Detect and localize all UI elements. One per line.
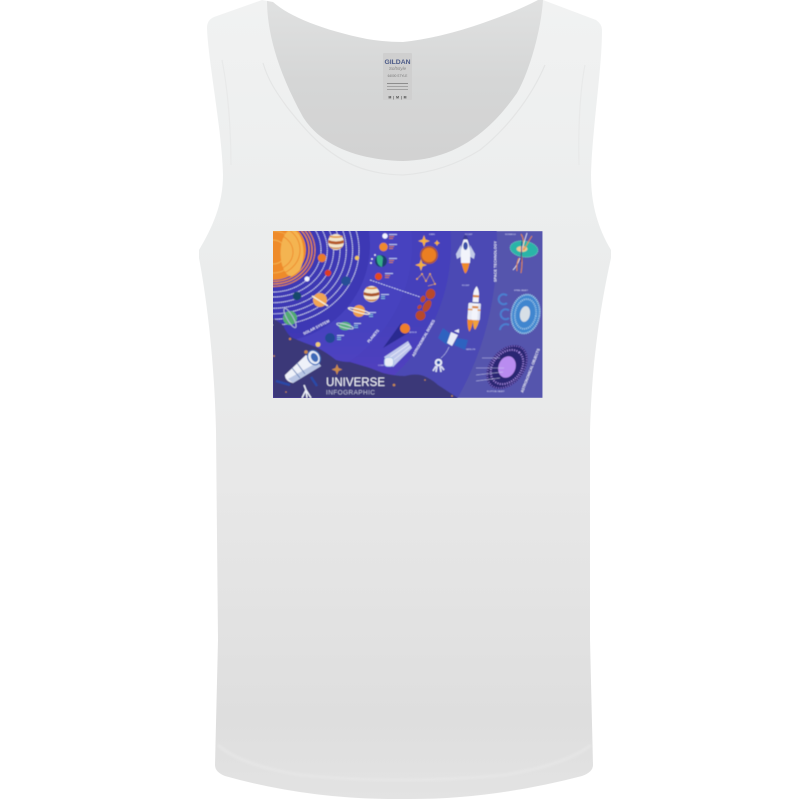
section labels — [303, 240, 541, 393]
tiny captions: SPIRAL GALAXY — [514, 289, 529, 292]
icon: earth — [370, 254, 387, 267]
stars and constellation — [415, 235, 440, 286]
tiny captions: ELLIPTICAL GALAXY — [487, 390, 505, 393]
icon: dark galaxy — [476, 344, 528, 390]
icon: telescope — [276, 348, 323, 398]
tiny planet captions — [337, 234, 397, 340]
title: INFOGRAPHIC — [326, 390, 375, 396]
icon: striped gas giant — [328, 234, 344, 250]
section labels: SPACE TECHNOLOGY — [494, 240, 498, 282]
garment body — [199, 0, 611, 799]
icon: spiral galaxy — [510, 293, 542, 335]
tiny captions: WORMHOLE — [505, 234, 517, 236]
hem seam — [218, 745, 591, 780]
icon: ringed orange planet — [312, 293, 328, 307]
title — [326, 377, 385, 396]
icons: ring gauges — [499, 294, 509, 330]
icon: star planet — [420, 246, 438, 264]
neck label: Gildan: GILDAN — [384, 59, 411, 66]
armhole seams — [222, 60, 585, 165]
icon: green ringed planet — [336, 322, 354, 330]
tank top garment — [199, 0, 611, 799]
section labels: ASTRONOMICAL OBJECTS — [520, 348, 541, 393]
panel: solar system orbits — [273, 231, 360, 326]
neck label: Gildan: Softstyle — [389, 66, 407, 71]
panel: planets column — [316, 233, 388, 347]
printed universe infographic — [273, 231, 542, 398]
neck label: Gildan: M | M | M — [389, 96, 407, 100]
tiny captions: SATELLITE — [466, 348, 476, 351]
tiny captions: COMET — [378, 365, 385, 367]
neck label: Gildan — [383, 53, 412, 100]
hill: dark landscape — [273, 318, 458, 398]
icon: small rocket — [456, 234, 475, 274]
diagram line: planets to bodies — [370, 280, 420, 297]
title: UNIVERSE — [326, 377, 385, 389]
white area above back collar — [262, 0, 538, 42]
neck opening — [267, 0, 543, 161]
icons: asteroids — [416, 287, 437, 320]
neck label: Gildan: 64000 STYLE — [388, 74, 407, 78]
section labels: SOLAR SYSTEM — [303, 319, 330, 336]
tiny captions: METEOR — [409, 332, 417, 334]
icon: sun — [273, 231, 316, 288]
tiny captions: ROCKET — [465, 234, 473, 236]
tiny captions: ROCKET — [462, 285, 470, 287]
decorative stars on hill — [273, 338, 453, 397]
icon: astronaut — [433, 359, 444, 372]
tiny captions — [378, 233, 529, 393]
solar system planets — [282, 234, 359, 329]
icon: saturn — [348, 305, 370, 317]
collar seam — [263, 63, 545, 175]
icon: meteor — [384, 341, 412, 367]
background bands — [273, 231, 542, 398]
icon: striped planet — [364, 286, 380, 302]
icon: launch rocket — [466, 286, 482, 332]
icon: ringed green planet — [282, 307, 298, 329]
tiny captions: STARS — [429, 233, 436, 236]
icon: satellite — [438, 328, 468, 358]
icon: orange comet — [383, 323, 410, 348]
icon: wormhole — [509, 233, 539, 273]
section labels: ASTRONOMICAL BODIES — [411, 319, 436, 358]
section labels: PLANETS — [367, 328, 380, 344]
